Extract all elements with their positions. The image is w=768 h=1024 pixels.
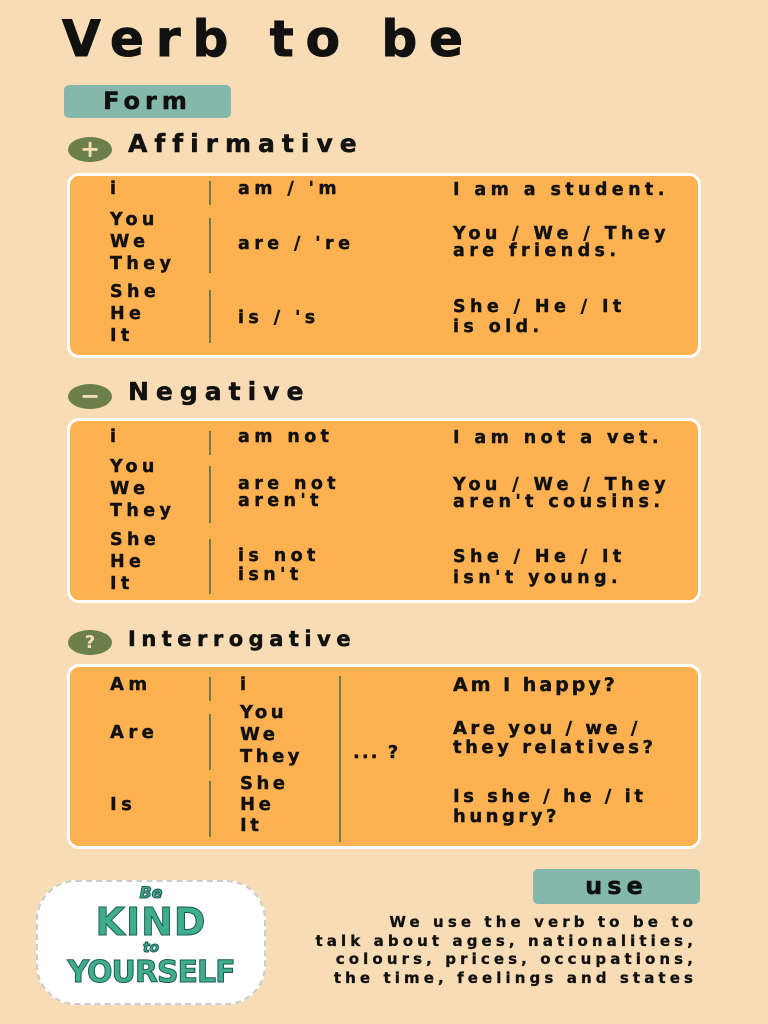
sticker: be kind to yourself: YOURSELF — [67, 955, 235, 990]
use text: We use the verb to be to — [389, 913, 697, 931]
panel: affirmative: They — [110, 254, 175, 274]
sticker: be kind to yourself: Be — [139, 883, 163, 902]
icon: question: ? — [85, 632, 95, 653]
sticker: be kind to yourself — [36, 880, 266, 1005]
panel: interrogative: You — [240, 702, 287, 723]
panel: negative: You / We / They — [453, 475, 670, 495]
panel: negative — [67, 418, 701, 603]
panel: negative: I am not a vet. — [453, 428, 663, 448]
panel: negative: am not — [238, 427, 333, 447]
panel: interrogative: He — [240, 794, 274, 815]
panel: affirmative: He — [110, 304, 145, 324]
panel: negative: aren't cousins. — [453, 492, 664, 512]
panel: negative: is not — [238, 546, 320, 566]
panel: negative: are not — [238, 474, 340, 494]
use label — [533, 869, 700, 904]
panel: interrogative: Are you / we / — [453, 718, 641, 739]
panel: interrogative: She — [240, 773, 288, 794]
use text: talk about ages, nationalities, — [316, 932, 697, 950]
panel: affirmative: are friends. — [453, 241, 620, 261]
panel: interrogative: We — [240, 724, 278, 745]
use label: use — [585, 872, 648, 900]
panel: interrogative: Am — [110, 674, 152, 695]
panel: affirmative: She / He / It — [453, 297, 626, 317]
panel: affirmative: She — [110, 282, 160, 302]
panel: negative: They — [110, 501, 175, 521]
sticker: be kind to yourself: KIND — [96, 900, 206, 944]
use text: colours, prices, occupations, — [336, 950, 697, 968]
panel: negative: We — [110, 479, 149, 499]
use text — [316, 913, 697, 986]
panel: interrogative: ... ? — [353, 742, 400, 763]
panel: interrogative: they relatives? — [453, 737, 656, 758]
panel: interrogative: i — [240, 675, 250, 695]
heading: interrogative: Interrogative — [128, 627, 356, 651]
icon: minus: − — [80, 382, 100, 410]
icon: minus — [68, 384, 112, 409]
panel: interrogative: It — [240, 815, 262, 836]
panel: affirmative: am / 'm — [238, 179, 341, 199]
panel: negative: It — [110, 574, 134, 594]
panel: negative: i — [110, 427, 120, 447]
panel: affirmative: is / 's — [238, 308, 320, 328]
panel: affirmative: i — [110, 179, 120, 199]
panel: affirmative: You / We / They — [453, 224, 670, 244]
heading: negative: Negative — [128, 377, 310, 406]
panel: negative: aren't — [238, 491, 323, 511]
icon: question — [68, 630, 112, 655]
panel: interrogative: Am I happy? — [453, 674, 618, 696]
panel: affirmative: We — [110, 232, 149, 252]
panel: interrogative — [67, 664, 701, 849]
panel: interrogative: Is — [110, 794, 136, 815]
panel: affirmative: I am a student. — [453, 180, 669, 200]
panel: affirmative: It — [110, 326, 134, 346]
panel: affirmative: You — [110, 210, 159, 230]
sticker: be kind to yourself: to — [143, 940, 159, 956]
panel: interrogative: Is she / he / it — [453, 786, 646, 807]
heading: affirmative: Affirmative — [128, 129, 364, 158]
panel: interrogative: hungry? — [453, 806, 560, 827]
use text: the time, feelings and states — [334, 968, 697, 986]
panel: affirmative: is old. — [453, 317, 544, 337]
panel: affirmative — [67, 173, 701, 358]
panel: negative: isn't — [238, 565, 303, 585]
title: Verb to be — [62, 10, 475, 68]
form label: Form — [103, 87, 192, 115]
panel: negative: isn't young. — [453, 568, 622, 588]
panel: interrogative: They — [240, 746, 303, 767]
panel: negative: You — [110, 457, 159, 477]
panel: interrogative: Are — [110, 722, 158, 743]
icon: plus — [68, 137, 112, 162]
panel: negative: She — [110, 530, 160, 550]
form label — [64, 85, 231, 118]
panel: negative: He — [110, 552, 145, 572]
panel: negative: She / He / It — [453, 547, 626, 567]
panel: affirmative: are / 're — [238, 234, 354, 254]
icon: plus: + — [80, 135, 100, 163]
